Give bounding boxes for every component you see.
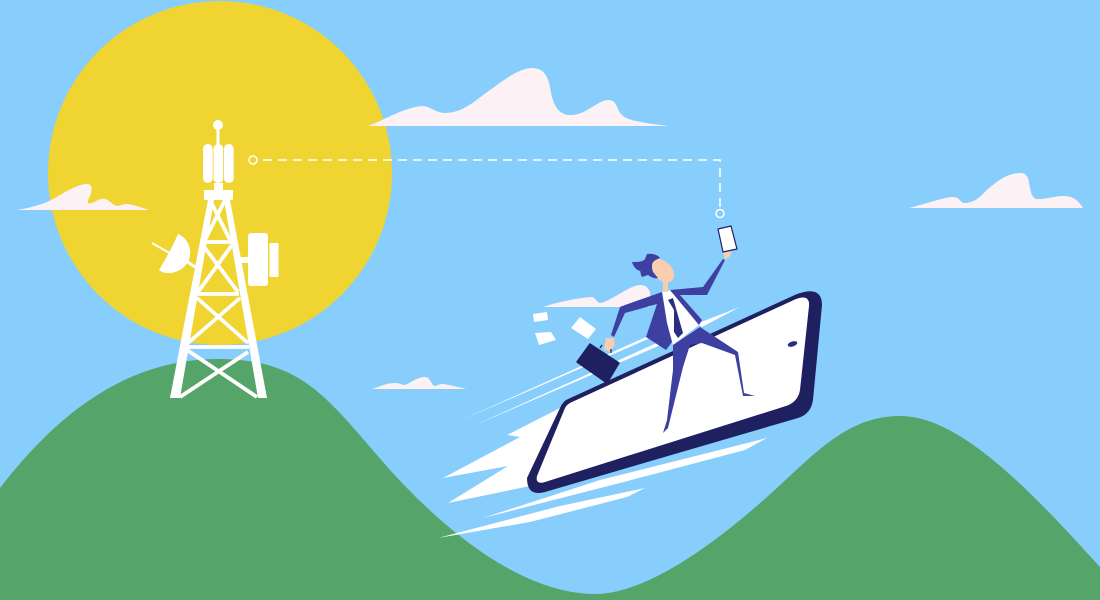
jacket — [611, 292, 672, 350]
cloud: right — [909, 173, 1083, 208]
phone camera dot — [787, 340, 798, 348]
trousers — [663, 327, 755, 433]
head and neck — [652, 259, 674, 292]
satellite dish — [152, 234, 195, 273]
phone screen — [537, 298, 809, 483]
businessman — [577, 226, 755, 433]
briefcase — [577, 344, 619, 383]
antenna panels — [203, 144, 234, 191]
microwave antenna — [241, 233, 278, 286]
tower frame — [170, 200, 267, 398]
cloud: small centre — [372, 377, 466, 389]
necktie — [668, 298, 683, 338]
raised hand — [723, 250, 732, 260]
sun — [48, 1, 392, 345]
thin streaks upper — [457, 333, 655, 422]
giant smartphone — [527, 291, 822, 493]
phone body — [527, 291, 822, 493]
hair — [632, 254, 660, 278]
signal tower — [152, 120, 278, 398]
cloud: top centre — [368, 68, 668, 126]
lower streaks — [483, 438, 767, 518]
small phone — [718, 226, 737, 252]
cloud: left — [17, 184, 150, 210]
burst behind phone — [443, 408, 560, 503]
signal dashed link — [249, 156, 724, 218]
flying papers — [533, 312, 596, 345]
cloud: behind businessman — [543, 285, 650, 307]
antenna mast — [213, 120, 223, 147]
speed streaks — [438, 307, 767, 538]
hills — [0, 359, 1100, 600]
shirt — [662, 290, 699, 345]
tower platform — [204, 190, 233, 200]
left hand — [604, 338, 615, 352]
